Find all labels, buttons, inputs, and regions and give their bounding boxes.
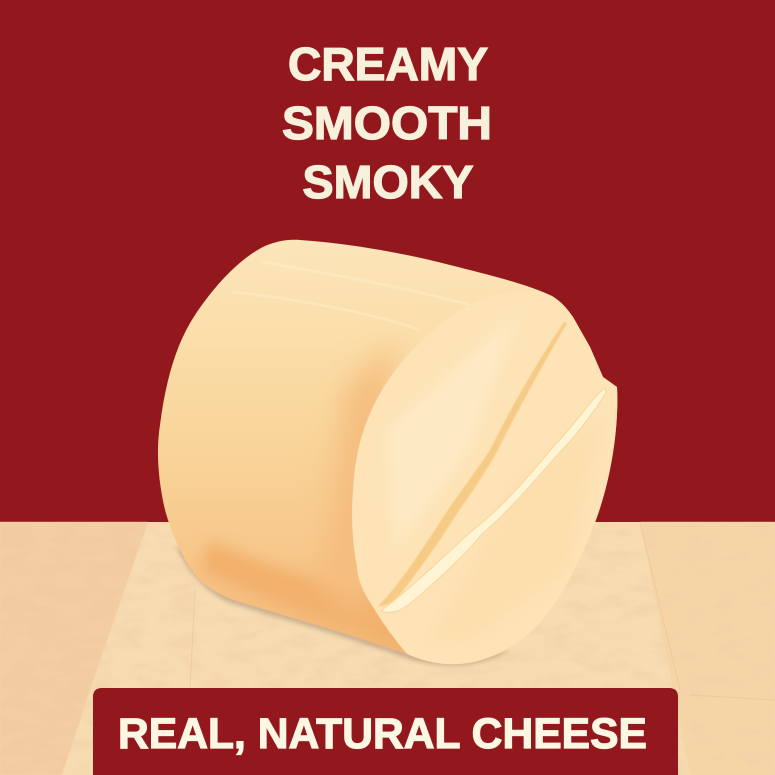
red background panel	[0, 0, 775, 522]
heading: creamy smooth smoky	[282, 38, 492, 208]
cheese shadow	[175, 545, 510, 666]
heading: creamy smooth smoky: SMOKY	[302, 156, 474, 208]
rind lower orange shading	[199, 540, 395, 642]
second cut	[381, 388, 606, 612]
heading: creamy smooth smoky: CREAMY	[288, 38, 488, 90]
wooden cutting board	[0, 522, 775, 775]
banner: real, natural cheese	[93, 688, 678, 775]
cheese cut face	[345, 285, 625, 670]
heading: creamy smooth smoky: SMOOTH	[282, 97, 492, 149]
cheese wheel	[150, 235, 630, 670]
banner: real, natural cheese: REAL, NATURAL CHEESE	[118, 710, 647, 758]
first cut	[378, 322, 567, 606]
rind ridge marks	[232, 262, 470, 330]
face soft light area	[388, 328, 508, 535]
cheese rind body	[150, 235, 630, 670]
